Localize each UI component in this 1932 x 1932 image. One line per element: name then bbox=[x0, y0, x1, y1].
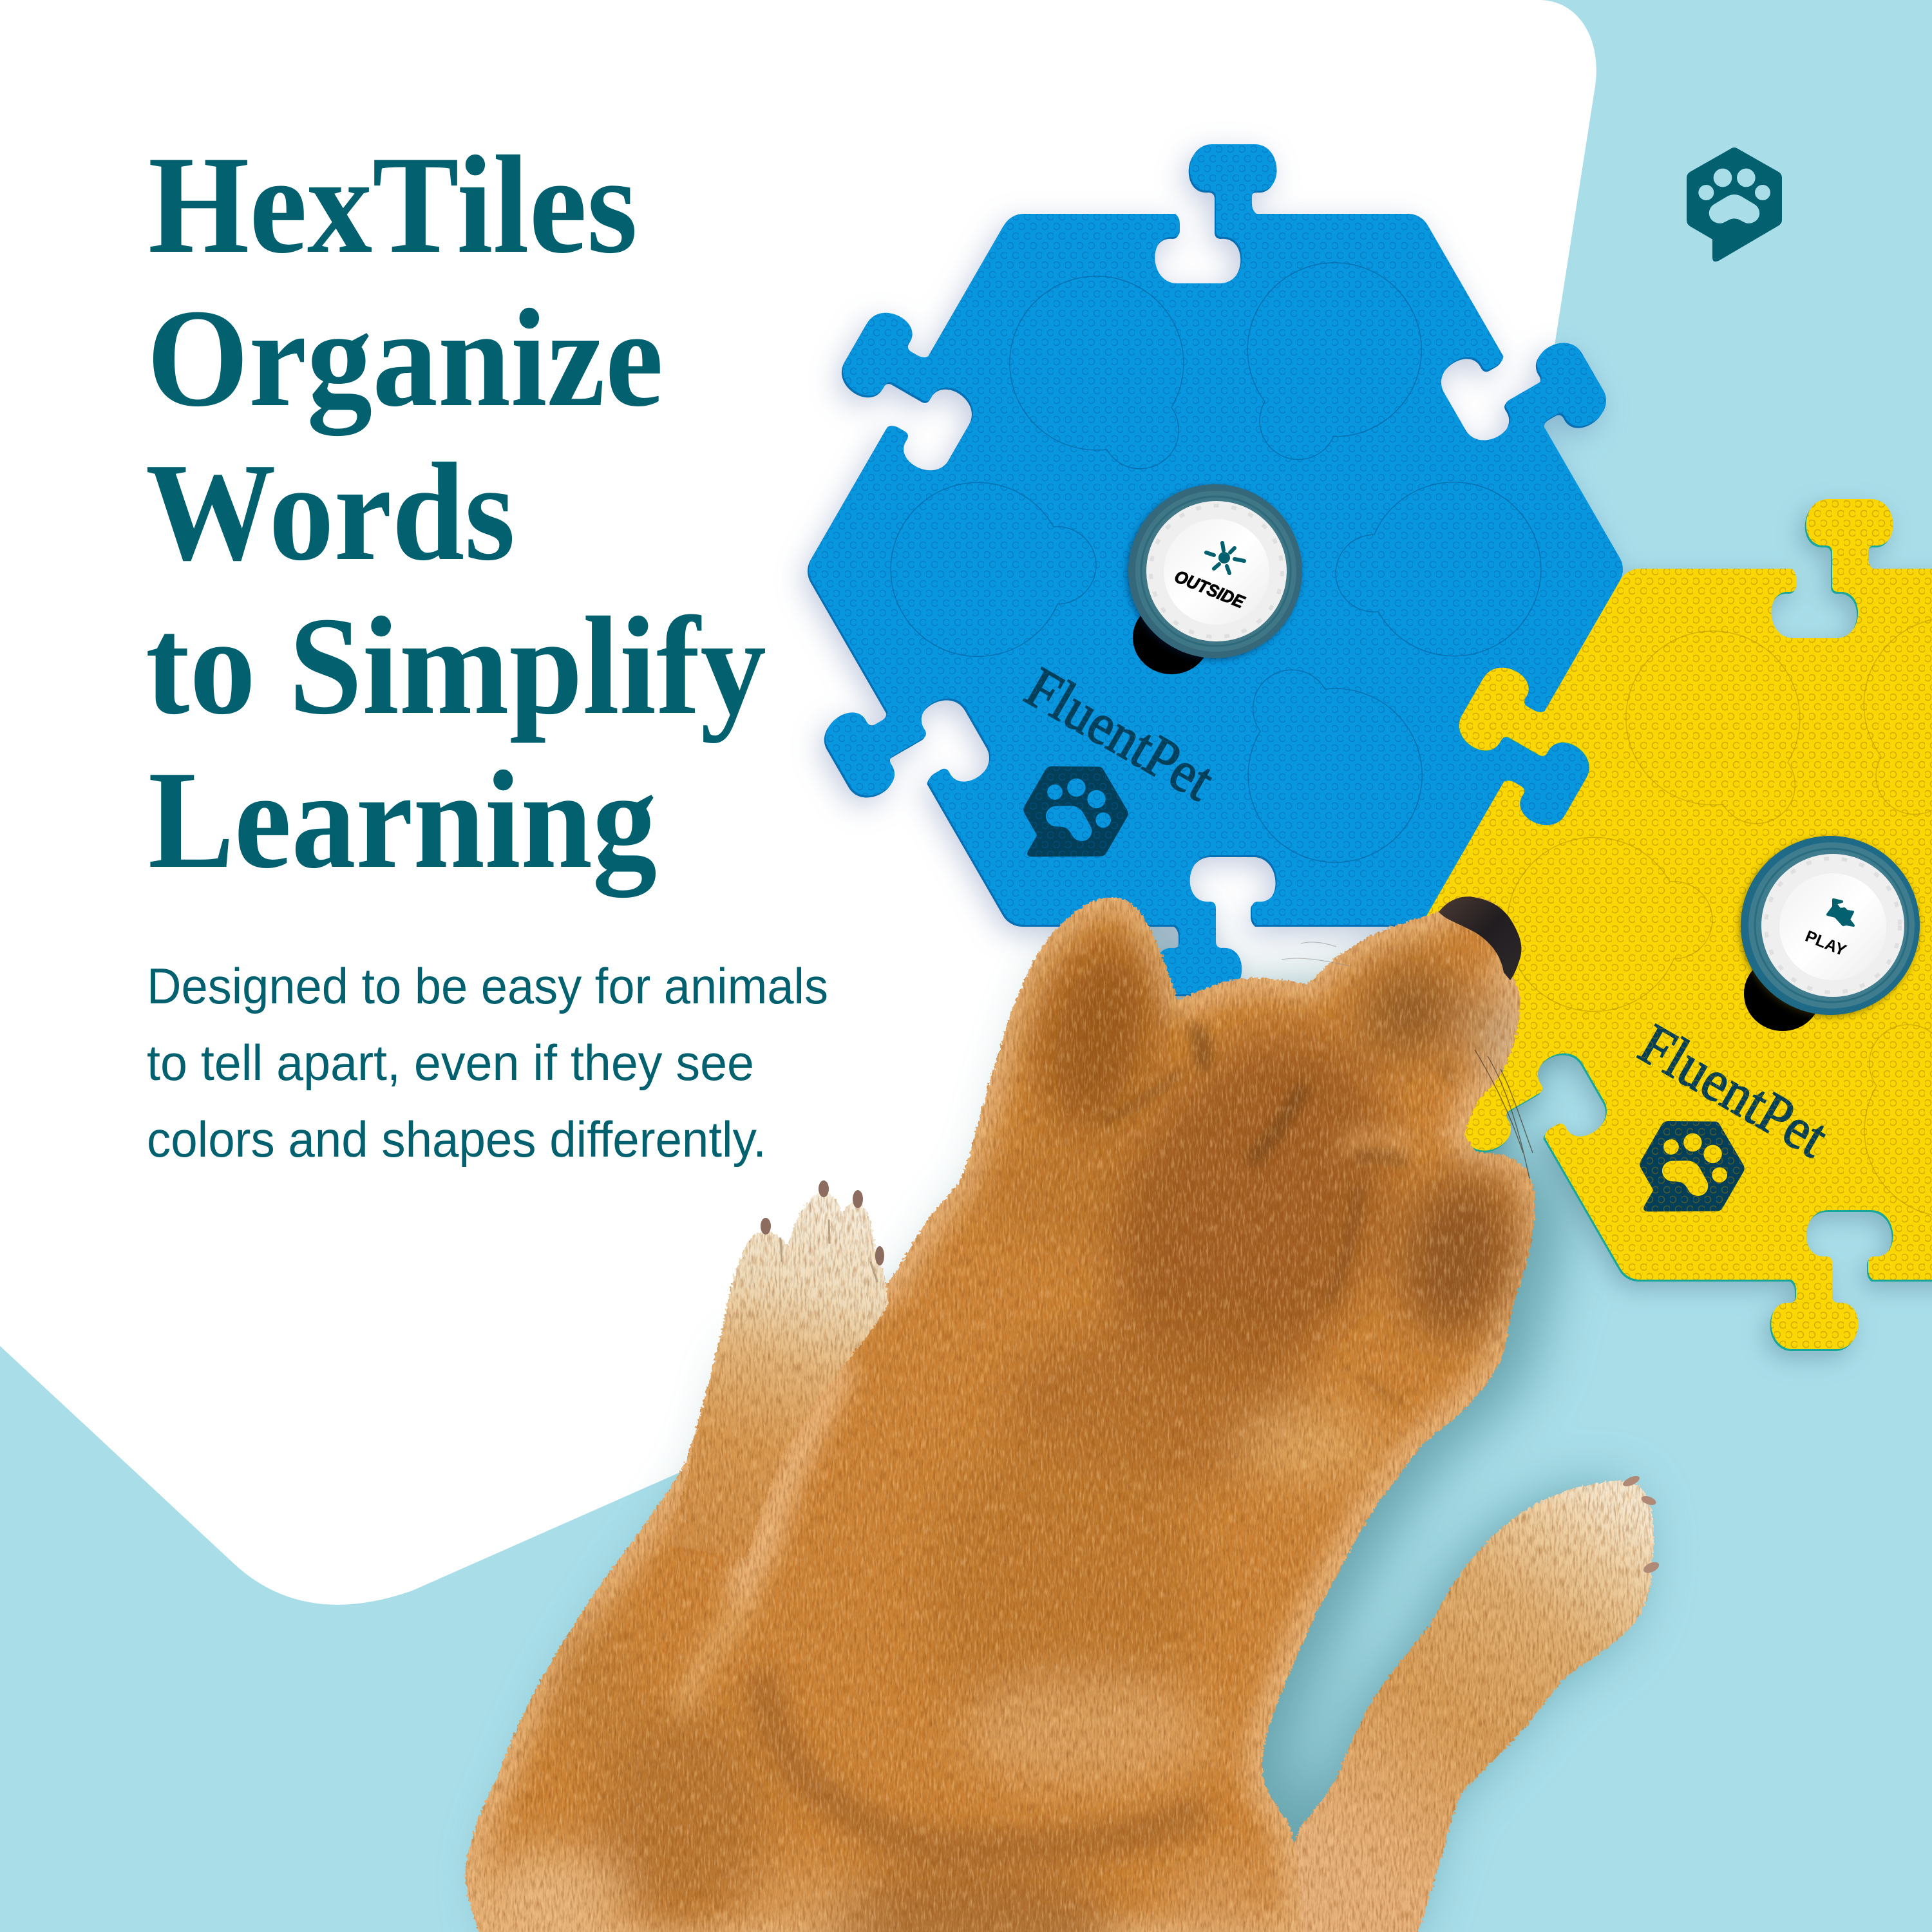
icon: paw logo bbox=[1004, 744, 1142, 889]
button: PLAY bbox=[1741, 836, 1920, 1031]
icon: cat bbox=[1828, 900, 1853, 925]
fur creases bbox=[1105, 1032, 1452, 1404]
blue tile surface bbox=[792, 139, 1624, 999]
button label: OUTSIDE bbox=[1172, 567, 1247, 612]
button label: PLAY bbox=[1803, 927, 1849, 960]
dog nose bbox=[1439, 896, 1521, 980]
heading: Organize bbox=[147, 281, 663, 436]
logo: FluentPet paw speech hexagon bbox=[1687, 147, 1782, 261]
body text bbox=[147, 958, 828, 1168]
white hexagon panel bbox=[0, 0, 1596, 1605]
blue hex tile bbox=[790, 137, 1625, 999]
dog floor shadow bbox=[497, 904, 1638, 1932]
button: OUTSIDE bbox=[1128, 484, 1302, 674]
heading: Learning bbox=[148, 743, 657, 898]
whiskers bbox=[1475, 1050, 1533, 1179]
yellow hex tile bbox=[1317, 409, 1932, 1439]
yellow tile shadow layer bbox=[1317, 409, 1932, 1439]
right paw claws bbox=[1622, 1474, 1661, 1575]
icon: sun bbox=[1206, 543, 1244, 573]
heading: to Simplify bbox=[146, 589, 766, 744]
dog body and head bbox=[419, 857, 1578, 1932]
left paw toe lines bbox=[781, 1220, 877, 1282]
dog fur group bbox=[419, 857, 1654, 1932]
tile texture bbox=[701, 54, 1731, 1084]
left paw claws bbox=[761, 1180, 884, 1265]
button shadow hole bbox=[1133, 601, 1210, 674]
dog photo illustration bbox=[419, 857, 1661, 1932]
body text: Designed to be easy for animals bbox=[147, 958, 828, 1014]
body text: to tell apart, even if they see bbox=[147, 1034, 754, 1091]
heading: HexTiles bbox=[148, 128, 638, 283]
body text: colors and shapes differently. bbox=[147, 1111, 766, 1168]
button position outlines bbox=[859, 231, 1573, 862]
FluentPet wordmark: FluentPet bbox=[1015, 656, 1224, 813]
dog right foreleg bbox=[1256, 1481, 1654, 1932]
button shadow hole bbox=[1744, 956, 1821, 1031]
heading bbox=[146, 128, 766, 898]
dog left paw bbox=[670, 1193, 887, 1558]
heading: Words bbox=[146, 435, 515, 590]
